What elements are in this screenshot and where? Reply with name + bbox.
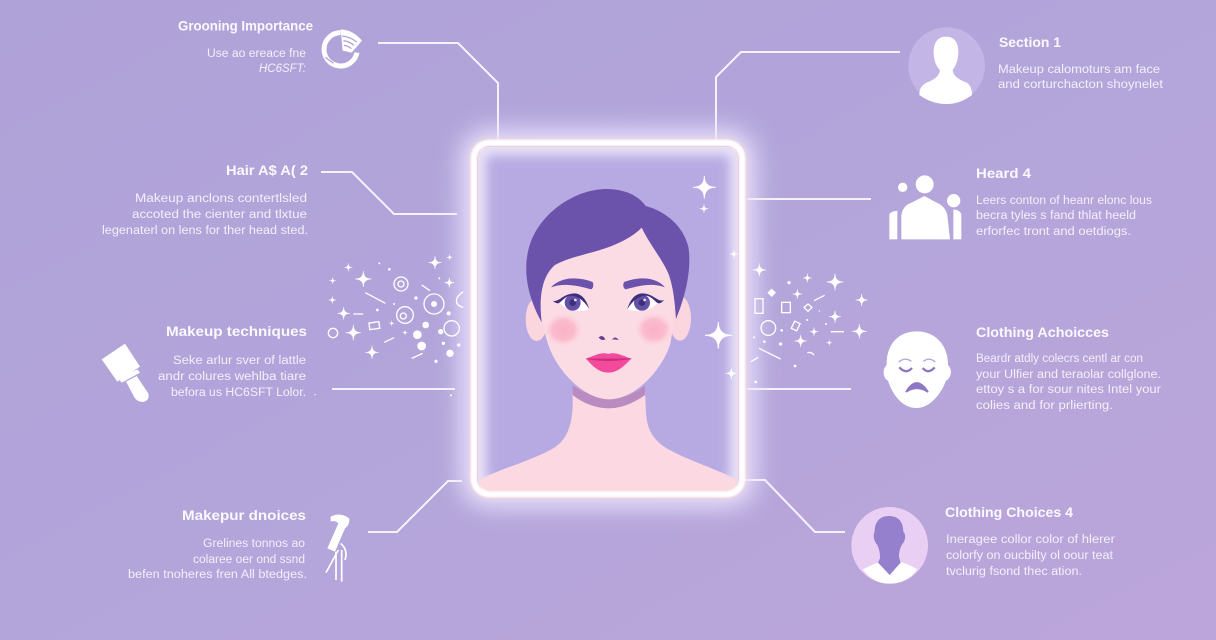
text block: makeup choices <box>128 538 307 581</box>
glowing portrait frame <box>474 143 742 494</box>
panel: section 1 <box>908 27 1164 104</box>
heading: makeup choices: Makepur dnoices <box>182 507 306 523</box>
text block: section 1: and corturchacton shoynelet <box>998 79 1164 91</box>
panel: grooming importance <box>178 18 362 75</box>
neck shadow <box>573 385 645 408</box>
panel: hair <box>102 162 308 237</box>
text block: grooming importance: HC6SFT: <box>259 63 306 75</box>
ears <box>526 296 691 341</box>
sparkles on frame interior <box>693 176 738 379</box>
panel: clothing choices 4 <box>851 504 1115 584</box>
icon: makeup applicator <box>326 515 349 582</box>
heading: hair: Hair A$ A( 2 <box>226 162 308 178</box>
panel: makeup choices <box>128 507 349 582</box>
text block: section 1: Makeup calomoturs am face <box>998 64 1160 76</box>
text block: clothing choices: ettoy s a for sour nites Intel your <box>976 384 1161 396</box>
text block: makeup techniques: befora us HC6SFT Lolor. <box>171 387 306 399</box>
icon: sad face <box>884 331 951 408</box>
text block: makeup techniques <box>158 355 306 399</box>
heading: makeup techniques: Makeup techniques <box>166 323 307 339</box>
portrait illustration <box>479 176 738 491</box>
text block: hair <box>102 193 308 237</box>
lips <box>586 353 631 373</box>
neck and shoulders <box>479 390 737 491</box>
panel: makeup techniques <box>102 323 307 402</box>
text block: clothing choices: Beardr atdly colecrs centl ar con <box>976 353 1143 365</box>
text block: clothing choices 4: colorfy on oucbilty ol oour teat <box>946 550 1114 562</box>
icon: portrait avatar <box>851 507 928 584</box>
text block: hair: accoted the cienter and tlxtue <box>132 209 307 221</box>
left eye <box>553 293 589 311</box>
text block: clothing choices: colies and for prlierting. <box>976 400 1113 412</box>
text block: section 1 <box>998 64 1164 91</box>
right sparkle cluster <box>751 263 868 383</box>
text block: grooming importance: Use ao ereace fne <box>207 48 306 60</box>
text block: makeup choices: colaree oer ond ssnd <box>193 554 305 566</box>
text block: clothing choices 4 <box>946 534 1115 578</box>
text block: makeup choices: befen tnoheres fren All btedges. <box>128 569 307 581</box>
text block: head 4: erforfec tront and oetdiogs. <box>976 226 1131 238</box>
text block: head 4: Leers conton of heanr elonc lous <box>976 195 1152 207</box>
hair <box>526 189 689 322</box>
text block: clothing choices: your Ulfier and teraolar collglone. <box>976 369 1161 381</box>
text block: clothing choices 4: Ineragee collor color of hlerer <box>946 534 1115 546</box>
text block: head 4: becra tyles s fand thlat heeld <box>976 210 1136 222</box>
icon: makeup brush <box>102 344 149 402</box>
heading: section 1: Section 1 <box>999 34 1061 50</box>
text block: head 4 <box>976 195 1152 238</box>
icon: group of people <box>889 175 961 239</box>
cheeks <box>543 311 675 348</box>
heading: clothing choices: Clothing Achoicces <box>976 324 1109 340</box>
text block: hair: Makeup anclons contertlsled <box>135 193 307 205</box>
left sparkle cluster <box>314 254 463 396</box>
icon: comb ring <box>324 29 362 66</box>
heading: clothing choices 4: Clothing Choices 4 <box>945 504 1073 520</box>
icon: person silhouette <box>908 27 985 104</box>
text block: makeup techniques: Seke arlur sver of lattle <box>173 355 306 367</box>
text block: clothing choices <box>976 353 1161 412</box>
eyebrows <box>551 278 665 289</box>
nose <box>599 336 619 340</box>
heading: head 4: Heard 4 <box>976 165 1031 181</box>
face <box>539 220 674 399</box>
heading: grooming importance: Grooning Importance <box>178 18 313 34</box>
panel: clothing choices <box>884 324 1161 412</box>
connector lines <box>321 43 900 532</box>
text block: grooming importance <box>207 48 306 75</box>
right eye <box>627 293 664 311</box>
panel: head 4 <box>889 165 1152 239</box>
text block: hair: legenaterl on lens for ther head sted. <box>102 225 308 237</box>
text block: makeup choices: Grelines tonnos ao <box>203 538 305 550</box>
text block: clothing choices 4: tvclurig fsond thec ation. <box>946 566 1082 578</box>
text block: makeup techniques: andr colures wehlba tiare <box>158 371 306 383</box>
